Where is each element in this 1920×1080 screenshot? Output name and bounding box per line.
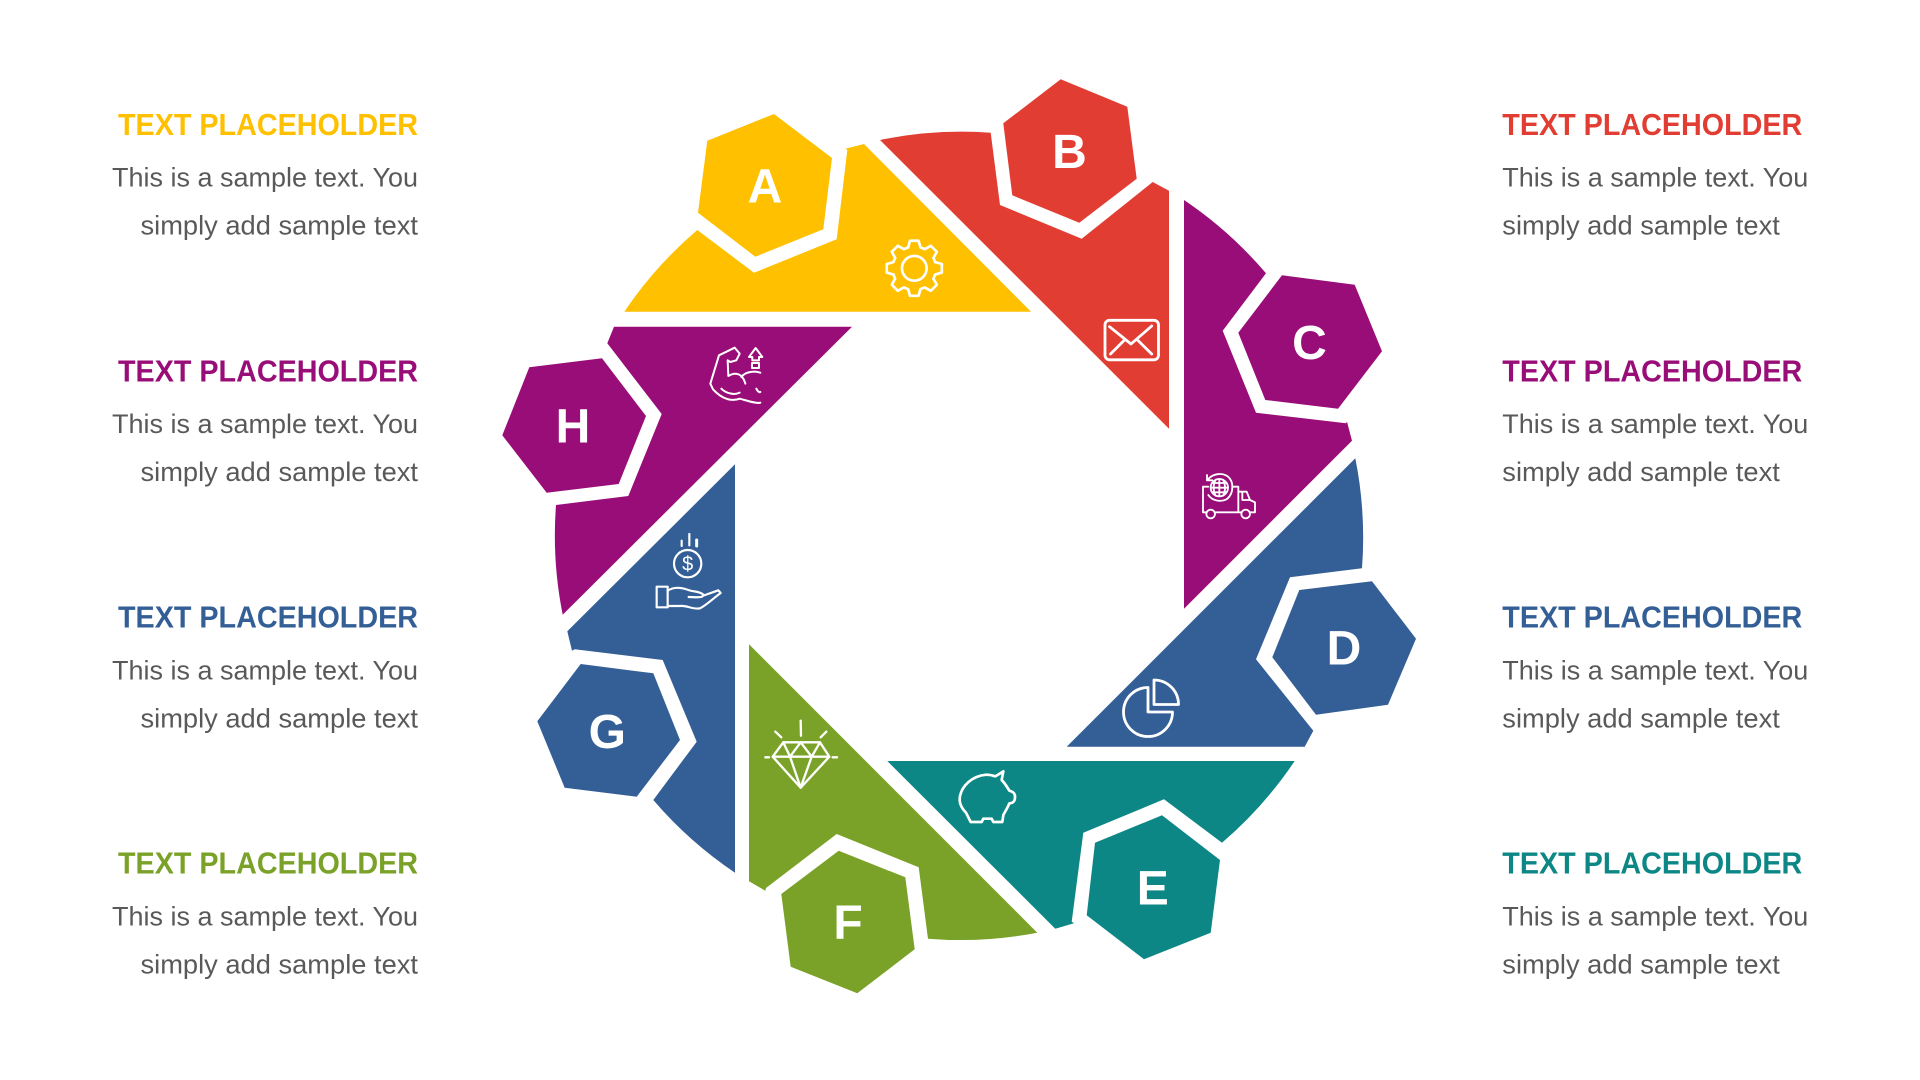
letter D: D	[1327, 623, 1361, 676]
body F: This is a sample text. You	[112, 902, 418, 932]
body B: This is a sample text. You	[1502, 163, 1808, 193]
hexagon F	[781, 851, 915, 993]
segment E	[887, 761, 1295, 959]
icon: delivery truck with globe	[1203, 474, 1255, 518]
hexagon G	[537, 664, 680, 797]
icon: envelope	[1105, 320, 1158, 360]
icon: gear	[887, 241, 942, 296]
text block H	[112, 354, 418, 487]
wedge E	[887, 761, 1295, 929]
heading B: TEXT PLACEHOLDER	[1502, 108, 1802, 142]
heading A: TEXT PLACEHOLDER	[118, 108, 418, 142]
segment B	[880, 79, 1169, 429]
text block D	[1502, 600, 1808, 733]
hexagon H	[502, 358, 646, 493]
heading E: TEXT PLACEHOLDER	[1502, 847, 1802, 881]
heading G: TEXT PLACEHOLDER	[118, 600, 418, 634]
wedge F	[749, 644, 1037, 940]
letter H: H	[556, 401, 590, 454]
wedge H	[555, 327, 852, 615]
text block E	[1502, 847, 1808, 980]
body A: simply add sample text	[140, 211, 418, 241]
body C: This is a sample text. You	[1502, 409, 1808, 439]
body C: simply add sample text	[1502, 457, 1780, 487]
body G: This is a sample text. You	[112, 655, 418, 685]
segment F	[749, 644, 1037, 993]
body B: simply add sample text	[1502, 211, 1780, 241]
dollar sign: $	[682, 554, 693, 576]
letter C: C	[1292, 317, 1327, 370]
icon: flexed muscle	[710, 348, 762, 403]
body D: simply add sample text	[1502, 703, 1780, 733]
heading C: TEXT PLACEHOLDER	[1502, 354, 1802, 388]
segment C	[1184, 200, 1382, 609]
icon: pie chart	[1124, 680, 1178, 736]
segment A	[624, 114, 1031, 312]
hexagon A	[698, 114, 832, 257]
wedge G	[567, 464, 735, 873]
letter G: G	[589, 706, 626, 759]
segment D	[1067, 458, 1416, 747]
hexagon C	[1238, 275, 1382, 409]
letter E: E	[1137, 863, 1169, 916]
body G: simply add sample text	[140, 703, 418, 733]
wedge B	[880, 132, 1169, 429]
text block F	[112, 847, 418, 980]
body H: simply add sample text	[140, 457, 418, 487]
body E: simply add sample text	[1502, 950, 1780, 980]
body F: simply add sample text	[140, 950, 418, 980]
text block A	[112, 108, 418, 241]
heading F: TEXT PLACEHOLDER	[118, 847, 418, 881]
heading H: TEXT PLACEHOLDER	[118, 354, 418, 388]
text block G	[112, 600, 418, 733]
icon: diamond	[765, 721, 837, 788]
wedge D	[1067, 458, 1363, 747]
hexagon E	[1087, 815, 1220, 959]
heading D: TEXT PLACEHOLDER	[1502, 600, 1802, 634]
wedge A	[624, 144, 1031, 312]
segment H	[502, 327, 852, 615]
icon: piggy bank	[960, 771, 1015, 822]
text block B	[1502, 108, 1808, 241]
segment G	[537, 464, 735, 873]
hexagon B	[1003, 79, 1137, 223]
body H: This is a sample text. You	[112, 409, 418, 439]
body A: This is a sample text. You	[112, 163, 418, 193]
letter B: B	[1052, 126, 1087, 179]
letter A: A	[748, 161, 782, 214]
letter F: F	[833, 897, 863, 950]
text block C	[1502, 354, 1808, 487]
wedge C	[1184, 200, 1352, 609]
body E: This is a sample text. You	[1502, 902, 1808, 932]
hexagon D	[1272, 581, 1416, 715]
icon: hand with coin	[657, 534, 721, 609]
body D: This is a sample text. You	[1502, 655, 1808, 685]
